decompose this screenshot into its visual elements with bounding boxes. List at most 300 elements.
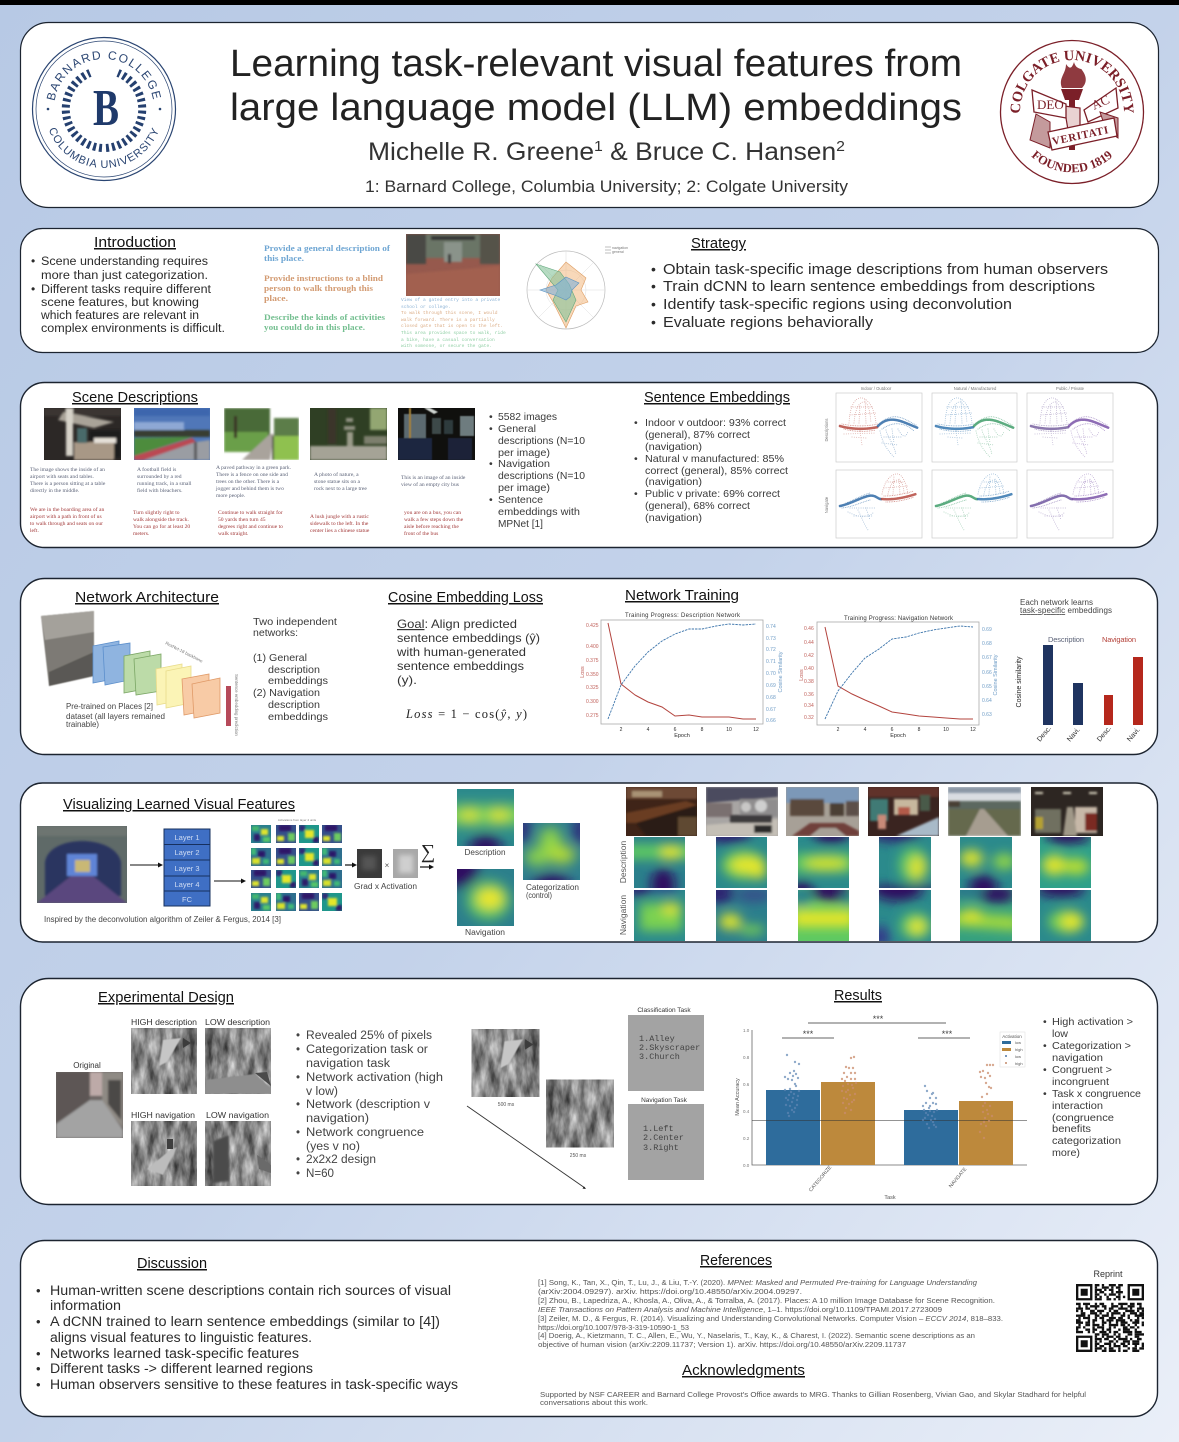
text: introduction bullets: [31, 254, 225, 335]
diagram: network architecture: ResNet-18 backbone: [165, 640, 204, 664]
logo: Colgate University: COLGATE UNIVERSITY: [1010, 50, 1134, 113]
chart: navigation network training: 0.65: [982, 684, 992, 690]
heading: Discussion: Discussion: [137, 1255, 207, 1272]
text: dataset bullets: •: [489, 494, 493, 506]
chart: description network training: 0.74: [766, 624, 776, 630]
chart: description network training: 0.275: [586, 713, 599, 719]
text: task prompts: Provide instructions to a blind: [264, 273, 383, 283]
chart: description network training: 0.68: [766, 695, 776, 701]
text: two networks: description: [268, 664, 320, 676]
chart: results bars: NAVIGATE: [948, 1166, 969, 1189]
chart: radar: [527, 246, 628, 329]
text: design bullets: Network (description v: [306, 1099, 430, 1111]
text: discussion bullets: A dCNN trained to learn sentence embeddings (similar to [4]): [50, 1314, 440, 1329]
panel: experimental design and results: [20, 978, 1158, 1204]
text: loss goal: (y).: [397, 673, 417, 687]
text: results bullets: incongruent: [1052, 1076, 1109, 1088]
chart: results bars: 0.4: [743, 1109, 750, 1114]
chart: navigation network training: 0.42: [804, 653, 814, 659]
text: strategy bullets: Obtain task-specific image descriptions from human observers: [663, 261, 1108, 278]
text: navigation descriptions: You can go for at least 20: [133, 523, 190, 530]
text: strategy bullets: Identify task-specific regions using deconvolution: [663, 296, 1012, 313]
text: embedding bullets: correct (general), 85% correct: [645, 465, 788, 477]
chart: radar: general: [612, 250, 624, 254]
text: embedding bullets: (navigation): [645, 441, 702, 453]
text: introduction bullets: •: [31, 282, 35, 296]
panel: classification task screen: Classification Task: [637, 1007, 691, 1014]
label: navigation row: Navigation: [618, 895, 628, 935]
heading: Scene Descriptions: Scene Descriptions: [72, 389, 198, 406]
image: 250 ms mask: [546, 1080, 614, 1159]
chart: results bars: CATEGORIZE: [808, 1164, 834, 1193]
logo: Colgate University: [1000, 40, 1144, 184]
text: example descriptions: walk forward. There is a partially: [401, 317, 495, 323]
legend: Activation: [1002, 1034, 1022, 1039]
chart: task-specific embeddings bars: task-specific embeddings: [1020, 606, 1112, 615]
text: reprint label: Reprint: [1093, 1269, 1123, 1279]
heatmap: description: [457, 789, 514, 846]
chart: task-specific embeddings bars: Each network learns: [1020, 598, 1093, 607]
text: results bullets: navigation: [1052, 1052, 1103, 1064]
text: discussion bullets: •: [36, 1377, 41, 1392]
text: task prompts: place.: [264, 293, 288, 303]
text: design bullets: •: [296, 1154, 300, 1166]
heading: Acknowledgments: Acknowledgments: [682, 1362, 805, 1379]
text: results bullets: •: [1043, 1040, 1047, 1052]
chart: results bars: 0.2: [743, 1136, 750, 1141]
text: design bullets: •: [296, 1127, 300, 1139]
authors: 2: [836, 138, 845, 155]
chart: description network training: 0.350: [586, 672, 599, 678]
text: general descriptions: running track, in a small: [137, 481, 192, 487]
text: references: IEEE Transactions on Pattern Analysis and Machine Intelligence , 1–1. https://doi.org/10.1109/TPAMI.2017.2723009: [538, 1305, 942, 1314]
text: results bullets: interaction: [1052, 1100, 1103, 1112]
chart: description network training: Epoch: [674, 733, 690, 739]
heading: Sentence Embeddings: Sentence Embeddings: [644, 389, 790, 406]
text: general descriptions: rock next to a large tree: [314, 486, 367, 492]
chart: embedding scatter plots: Natural / Manufactured: [954, 386, 997, 391]
text: dataset bullets: per image): [498, 482, 550, 494]
text: acknowledgments: Supported by NSF CAREER and Barnard College Provost's Office awards to MRG. Thanks to Gillian Rosenberg, Vivian Gao, and Skylar Stadhard for helpful: [540, 1390, 1086, 1399]
text: general descriptions: surrounded by a red: [137, 474, 182, 480]
label: categorization heatmap: Categorization: [526, 883, 579, 892]
text: design bullets: N=60: [306, 1168, 334, 1180]
heatmaps: navigation row: [624, 875, 1091, 948]
text: references: [3] Zeiler, M. D., & Fergus, R. (2014). Visualizing and Understanding Convolutional Networks. Computer Vision – ECCV 2014 , 818–833.: [538, 1314, 1003, 1323]
icon: QR code: [1076, 1284, 1144, 1352]
text: general descriptions: This is an image of an inside: [401, 474, 466, 481]
text: results bullets: (congruence: [1052, 1112, 1114, 1124]
text: discussion bullets: aligns visual features to linguistic features.: [50, 1330, 312, 1345]
image: airport: [44, 408, 121, 460]
text: discussion bullets: Networks learned task-specific features: [50, 1346, 299, 1361]
text: general descriptions: jogger and behind them is two: [215, 486, 284, 492]
diagram: network architecture: [41, 611, 239, 736]
legend: high: [1015, 1047, 1023, 1052]
image: 500 ms stimulus: 500 ms: [498, 1102, 515, 1108]
image: low navigation: LOW navigation: [206, 1111, 269, 1120]
label: description heatmap: Description: [464, 848, 506, 857]
chart: embedding scatter plots: [824, 386, 1113, 538]
text: general descriptions: [30, 465, 466, 499]
text: loss goal: sentence embeddings: [397, 659, 524, 673]
text: results bullets: categorization: [1052, 1135, 1121, 1147]
chart: description network training: 0.70: [766, 671, 776, 677]
text: dataset bullets: •: [489, 423, 493, 435]
text: two networks: (2) Navigation: [253, 687, 320, 699]
text: design bullets: Network activation (high: [306, 1072, 443, 1084]
text: design bullets: 2x2x2 design: [306, 1154, 376, 1166]
text: design bullets: navigation): [306, 1113, 369, 1125]
text: introduction bullets: which features are relevant in: [40, 308, 199, 322]
authors: 1: [594, 138, 603, 155]
text: dataset bullets: Navigation: [498, 458, 550, 470]
chart: description network training: 0.300: [586, 699, 599, 705]
image: salon: [706, 787, 778, 836]
heatmap: categorization: [523, 823, 580, 880]
chart: task-specific embeddings bars: [1016, 598, 1143, 743]
arrow: trial timeline: [467, 1106, 586, 1189]
chart: description network training: 0.425: [586, 623, 599, 629]
text: introduction bullets: scene features, but knowing: [41, 295, 199, 309]
chart: results bars: ***: [873, 1014, 884, 1024]
text: embedding bullets: (navigation): [645, 512, 702, 524]
chart: task-specific embeddings bars: Navi.: [1066, 727, 1082, 743]
text: references: https://doi.org/10.1007/978-3-319-10590-1_53: [538, 1323, 689, 1332]
text: embedding bullets: Indoor v outdoor: 93% correct: [645, 417, 786, 429]
image: 500 ms stimulus: [472, 1029, 540, 1108]
text: pre-trained note: trainable): [66, 720, 99, 729]
image: 250 ms mask: 250 ms: [570, 1153, 587, 1159]
text: strategy bullets: [651, 261, 1108, 331]
logo: Barnard College: BARNARD COLLEGE: [46, 51, 161, 100]
text: results bullets: Task x congruence: [1052, 1088, 1141, 1100]
text: navigation descriptions: meters.: [133, 531, 150, 537]
text: loss goal: [396, 617, 540, 687]
panel: header: [20, 22, 1160, 208]
text: embedding bullets: •: [634, 453, 638, 465]
chart: description network training: Cosine Similarity: [778, 651, 784, 692]
chart: navigation network training: 2: [837, 727, 840, 733]
text: discussion bullets: •: [36, 1283, 41, 1298]
text: general descriptions: trees on the other. There is a: [216, 479, 280, 485]
text: general descriptions: more people.: [216, 493, 246, 499]
image: plaza: [786, 787, 859, 836]
chart: results bars: Mean Accuracy: [735, 1078, 741, 1116]
title: Learning task-relevant visual features from: [230, 43, 962, 85]
heatmap: navigation: [457, 869, 514, 926]
text: results bullets: High activation >: [1052, 1016, 1133, 1028]
chart: results bars: 0.8: [743, 1055, 750, 1060]
text: navigation descriptions: front of the bus: [404, 530, 438, 537]
text: introduction bullets: Different tasks require different: [41, 282, 212, 296]
chart: task-specific embeddings bars: Navigation: [1102, 635, 1136, 644]
panel: navigation task screen: [628, 1097, 704, 1180]
chart: navigation network training: Training Progress: Navigation Network: [844, 616, 954, 622]
panel: network architecture, loss and training: [20, 578, 1158, 754]
heading: Experimental Design: Experimental Design: [98, 989, 234, 1006]
chart: task-specific embeddings bars: Desc.: [1036, 725, 1053, 743]
chart: results bars: 1.0: [743, 1028, 750, 1033]
text: example descriptions: View of a gated entry into a private: [401, 297, 500, 303]
text: discussion bullets: Human-written scene descriptions contain rich sources of visual: [50, 1283, 451, 1298]
chart: navigation network training: 0.46: [804, 626, 814, 632]
chart: task-specific embeddings bars: Cosine similarity: [1016, 656, 1023, 707]
image: high navigation: [131, 1111, 197, 1186]
label: description row: Description: [618, 840, 628, 883]
chart: navigation network training: 6: [891, 727, 894, 733]
chart: navigation network training: 0.40: [804, 666, 814, 672]
text: general descriptions: A football field is: [137, 466, 176, 473]
text: results bullets: benefits: [1052, 1123, 1091, 1135]
chart: navigation network training: 0.34: [804, 703, 814, 709]
label: categorization heatmap: (control): [526, 891, 552, 900]
text: dataset bullets: per image): [498, 447, 550, 459]
text: two networks: description: [268, 699, 320, 711]
text: task prompts: [264, 243, 390, 332]
heading: Strategy: Strategy: [691, 235, 746, 252]
image: park path: [224, 408, 299, 460]
text: task prompts: person to walk through this: [264, 283, 374, 293]
text: two networks: [253, 616, 337, 723]
text: design bullets: •: [296, 1044, 300, 1056]
text: results bullets: more): [1052, 1147, 1080, 1159]
text: dataset bullets: MPNet [1]: [498, 518, 543, 530]
text: navigation descriptions: 50 yards then turn 45: [218, 517, 266, 523]
diagram: network architecture: Sentence embedding prediction: [234, 674, 239, 736]
diagram: network layers: Layer 1: [174, 833, 200, 842]
text: loss goal: sentence embeddings (ŷ): [397, 631, 540, 645]
legend: high: [1015, 1061, 1023, 1066]
image: dirt road: [948, 787, 1021, 836]
text: results bullets: Categorization >: [1052, 1040, 1131, 1052]
text: discussion bullets: Different tasks -> different learned regions: [50, 1361, 313, 1376]
image: stone statue: [310, 408, 387, 460]
chart: description network training: 0.72: [766, 647, 776, 653]
chart: navigation network training: 0.69: [982, 627, 992, 633]
text: embedding bullets: (general), 68% correct: [645, 500, 750, 512]
text: introduction bullets: complex environments is difficult.: [41, 321, 225, 335]
text: example descriptions: school or college.: [401, 304, 451, 310]
logo: Colgate University: DEO: [1037, 97, 1064, 112]
label: navigation heatmap: Navigation: [465, 928, 505, 937]
chart: description network training: 0.325: [586, 685, 599, 691]
panel: classification task screen: [628, 1007, 704, 1091]
image: low description: LOW description: [205, 1018, 270, 1027]
image: low description: [205, 1018, 271, 1094]
chart: task-specific embeddings bars: Description: [1048, 635, 1084, 644]
chart: results bars: Task: [884, 1195, 896, 1201]
heading: Network Architecture: Network Architecture: [75, 589, 219, 606]
text: navigation descriptions: [30, 506, 464, 537]
text: example descriptions: a bike, have a casual conversation: [401, 337, 495, 343]
chart: navigation network training: 0.64: [982, 698, 992, 704]
chart: navigation network training: 12: [970, 727, 976, 733]
chart: navigation network training: 0.68: [982, 641, 992, 647]
text: dataset bullets: descriptions (N=10: [498, 470, 585, 482]
chart: navigation network training: Epoch: [890, 733, 906, 739]
text: design bullets: (yes v no): [306, 1141, 360, 1153]
chart: navigation network training: 0.66: [982, 670, 992, 676]
logo: Colgate University: FOUNDED 1819: [1031, 150, 1112, 172]
legend: low: [1015, 1040, 1021, 1045]
chart: navigation network training: 10: [943, 727, 949, 733]
text: navigation descriptions: you are on a bus, you can: [404, 510, 461, 516]
chart: navigation network training: [799, 616, 999, 739]
text: loss goal: Goal: Align predicted: [397, 617, 517, 631]
text: navigation descriptions: A lush jungle with a rustic: [310, 514, 369, 520]
logo: Barnard College: [32, 36, 176, 182]
legend: low: [1015, 1054, 1021, 1059]
chart: task-specific embeddings bars: Navi.: [1126, 727, 1142, 743]
chart: results bars: ***: [942, 1029, 953, 1039]
logo: Barnard College: B: [93, 80, 119, 137]
text: acknowledgments: [540, 1390, 1086, 1407]
label: categorization heatmap: [526, 883, 579, 900]
chart: embedding scatter plots: Indoor / Outdoor: [861, 386, 892, 391]
text: deconvolution note: Inspired by the deconvolution algorithm of Zeiler & Fergus, 2014 [3]: [44, 915, 281, 924]
text: two networks: embeddings: [268, 675, 328, 687]
image: high description: [131, 1018, 197, 1094]
legend: [1000, 1032, 1025, 1067]
text: strategy bullets: •: [651, 261, 656, 277]
chart: results bars: 0.0: [743, 1163, 750, 1168]
text: references: (arXiv:2004.09297). arXiv. https://doi.org/10.48550/arXiv.2004.09297.: [538, 1287, 802, 1296]
image: low navigation: [205, 1111, 271, 1186]
chart: description network training: 0.71: [766, 659, 776, 665]
image: carousel: [868, 787, 939, 836]
text: discussion bullets: •: [36, 1346, 41, 1361]
panel: classification task screen: 2.Skyscraper: [639, 1043, 700, 1053]
logo: Colgate University: VERITATI: [1051, 124, 1109, 148]
text: dataset bullets: General: [498, 423, 536, 435]
text: strategy bullets: •: [651, 278, 656, 294]
text: design bullets: Categorization task or: [306, 1044, 428, 1056]
panel: discussion, references, acknowledgments: [20, 1240, 1158, 1416]
text: navigation descriptions: walk a few steps down the: [404, 516, 464, 523]
chart: navigation network training: 0.44: [804, 640, 814, 646]
image: bar interior: [626, 787, 697, 836]
panel: scene descriptions and sentence embeddings: [20, 382, 1158, 548]
text: general descriptions: stone statue sits on a: [314, 479, 361, 485]
text: dataset bullets: 5582 images: [498, 411, 557, 423]
text: discussion bullets: •: [36, 1314, 41, 1329]
text: general descriptions: A photo of nature, a: [314, 471, 359, 478]
chart: description network training: 4: [647, 727, 650, 733]
chart: navigation network training: 0.63: [982, 712, 992, 718]
text: design bullets: •: [296, 1168, 300, 1180]
text: design bullets: •: [296, 1072, 300, 1084]
text: embedding bullets: (navigation): [645, 476, 702, 488]
text: strategy bullets: •: [651, 314, 656, 330]
chart: navigation network training: Cosine Similarity: [993, 654, 999, 695]
logo: Colgate University: AC: [1089, 92, 1112, 113]
text: general descriptions: A paved pathway in a green park.: [216, 465, 292, 471]
text: embedding bullets: Natural v manufactured: 85%: [645, 453, 784, 465]
text: task prompts: Provide a general description of: [264, 243, 390, 253]
text: navigation descriptions: center lies a chinese statue: [310, 528, 370, 534]
text: general descriptions: There is a person sitting at a table: [30, 481, 106, 487]
text: navigation descriptions: We are in the boarding area of an: [30, 506, 104, 513]
title: [230, 43, 962, 129]
text: navigation descriptions: to walk through and seats on our: [30, 521, 103, 527]
chart: description network training: Loss: [580, 666, 586, 678]
diagram: grad x activation: [345, 841, 435, 891]
text: dataset bullets: •: [489, 458, 493, 470]
text: general descriptions: directly in the middle.: [30, 488, 80, 494]
text: discussion bullets: Human observers sensitive to these features in task-specific ways: [50, 1377, 458, 1392]
chart: navigation network training: 0.67: [982, 655, 992, 661]
text: results bullets: low: [1052, 1028, 1068, 1040]
text: pre-trained note: [66, 702, 165, 729]
chart: embedding scatter plots: Descriptions: [824, 418, 829, 442]
text: two networks: networks:: [253, 627, 298, 639]
text: navigation descriptions: Turn slightly right to: [133, 510, 180, 516]
text: strategy bullets: Evaluate regions behaviorally: [663, 314, 874, 331]
chart: description network training: 0.66: [766, 718, 776, 724]
chart: description network training: 6: [674, 727, 677, 733]
chart: description network training: 2: [620, 727, 623, 733]
panel: navigation task screen: 3.Right: [643, 1143, 679, 1153]
diagram: network layers: FC: [182, 895, 193, 904]
chart: navigation network training: 0.36: [804, 692, 814, 698]
image: high navigation: HIGH navigation: [131, 1111, 195, 1120]
text: example descriptions: [401, 297, 506, 349]
text: design bullets: Network congruence: [306, 1127, 424, 1139]
text: general descriptions: view of an empty city bus: [401, 481, 459, 488]
text: design bullets: Revealed 25% of pixels: [306, 1030, 432, 1042]
text: references: [4] Doerig, A., Kietzmann, T. C., Allen, E., Wu, Y., Naselaris, T., Kay, K., & Charest, I. (2022). Semantic scene descriptions as an: [538, 1331, 975, 1340]
chart: results bars: ***: [803, 1029, 814, 1039]
chart: description network training: 0.69: [766, 683, 776, 689]
text: dataset bullets: descriptions (N=10: [498, 435, 585, 447]
chart: navigation network training: 0.38: [804, 679, 814, 685]
text: pre-trained note: Pre-trained on Places [2]: [66, 702, 153, 711]
chart: description network training: 8: [701, 727, 704, 733]
diagram: grad x activation: Grad x Activation: [354, 882, 417, 891]
heading: Cosine Embedding Loss: Cosine Embedding Loss: [388, 589, 543, 606]
text: general descriptions: field with bleachers.: [137, 487, 183, 494]
text: discussion bullets: •: [36, 1361, 41, 1376]
text: two networks: Two independent: [253, 616, 337, 628]
image: gated entry: [406, 234, 500, 296]
chart: embedding scatter plots: Navigate: [824, 496, 829, 513]
chart: description network training: 0.67: [766, 707, 776, 713]
text: pre-trained note: dataset (all layers remained: [66, 712, 165, 721]
image: football field: [134, 408, 210, 460]
chart: results bars: [735, 1014, 1027, 1201]
affiliations: 1: Barnard College, Columbia University; 2: Colgate University: [365, 177, 849, 196]
text: example descriptions: This area provides space to walk, ride: [401, 330, 506, 336]
text: navigation descriptions: walk straight.: [218, 531, 249, 537]
text: design bullets: v low): [306, 1086, 338, 1098]
text: embedding bullets: •: [634, 417, 638, 429]
heading: Network Training: Network Training: [625, 587, 739, 604]
chart: results bars: 0.6: [743, 1082, 750, 1087]
image: city bus: [398, 408, 475, 460]
text: navigation descriptions: left.: [30, 527, 39, 534]
chart: task-specific embeddings bars: Desc.: [1096, 725, 1113, 743]
text: design bullets: navigation task: [306, 1058, 390, 1070]
text: example descriptions: with someone, or secure the gate.: [401, 343, 492, 349]
chart: description network training: [580, 613, 784, 739]
diagram: grad x activation: ×: [385, 861, 390, 870]
chart: description network training: 0.400: [586, 644, 599, 650]
text: introduction bullets: •: [31, 254, 35, 268]
text: dataset bullets: embeddings with: [498, 506, 580, 518]
text: design bullets: [296, 1030, 443, 1180]
text: general descriptions: There is a fence on one side and: [216, 471, 288, 478]
